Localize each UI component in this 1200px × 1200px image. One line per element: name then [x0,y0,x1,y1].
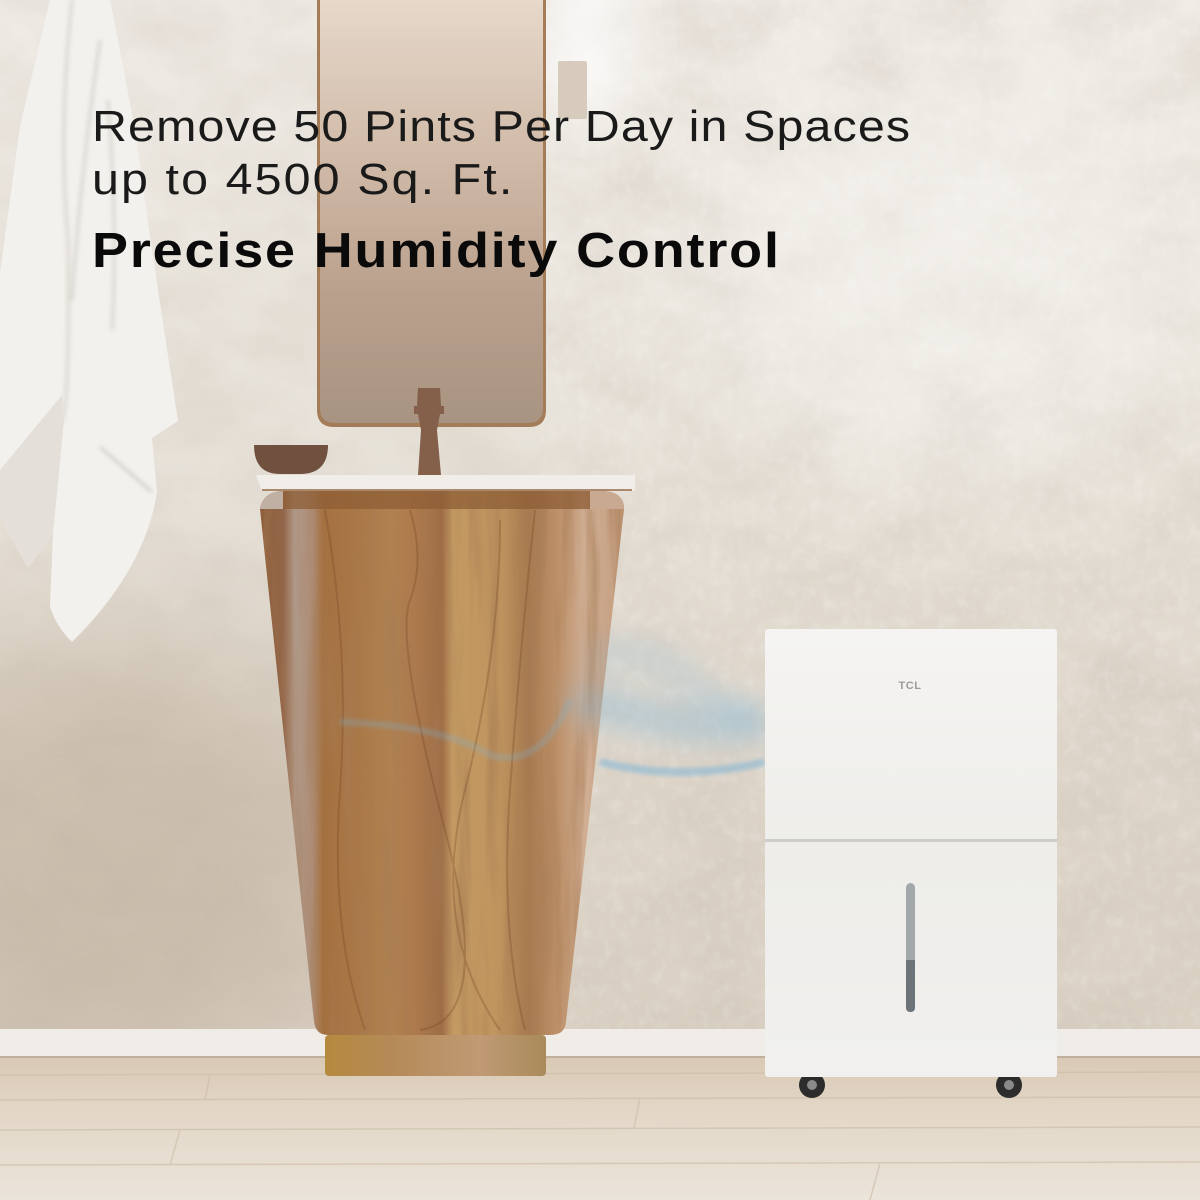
casters [799,1072,1022,1098]
vanity cabinet [255,490,630,1040]
bowl [254,445,328,474]
dehumidifier [765,629,1057,1098]
blue airflow [340,654,765,772]
baseboard [0,1029,1200,1058]
headline line 2: up to 4500 Sq. Ft. [92,155,514,204]
TCL logo: TCL [899,680,921,692]
wood floor [0,1058,1200,1200]
headline line 1: Remove 50 Pints Per Day in Spaces [92,102,911,151]
wall lamp [558,61,587,119]
faucet [414,388,444,475]
brass base [325,1035,546,1076]
mirror [317,0,546,427]
subheading: Precise Humidity Control [92,224,781,278]
sink top [256,475,635,491]
towel [0,0,178,642]
